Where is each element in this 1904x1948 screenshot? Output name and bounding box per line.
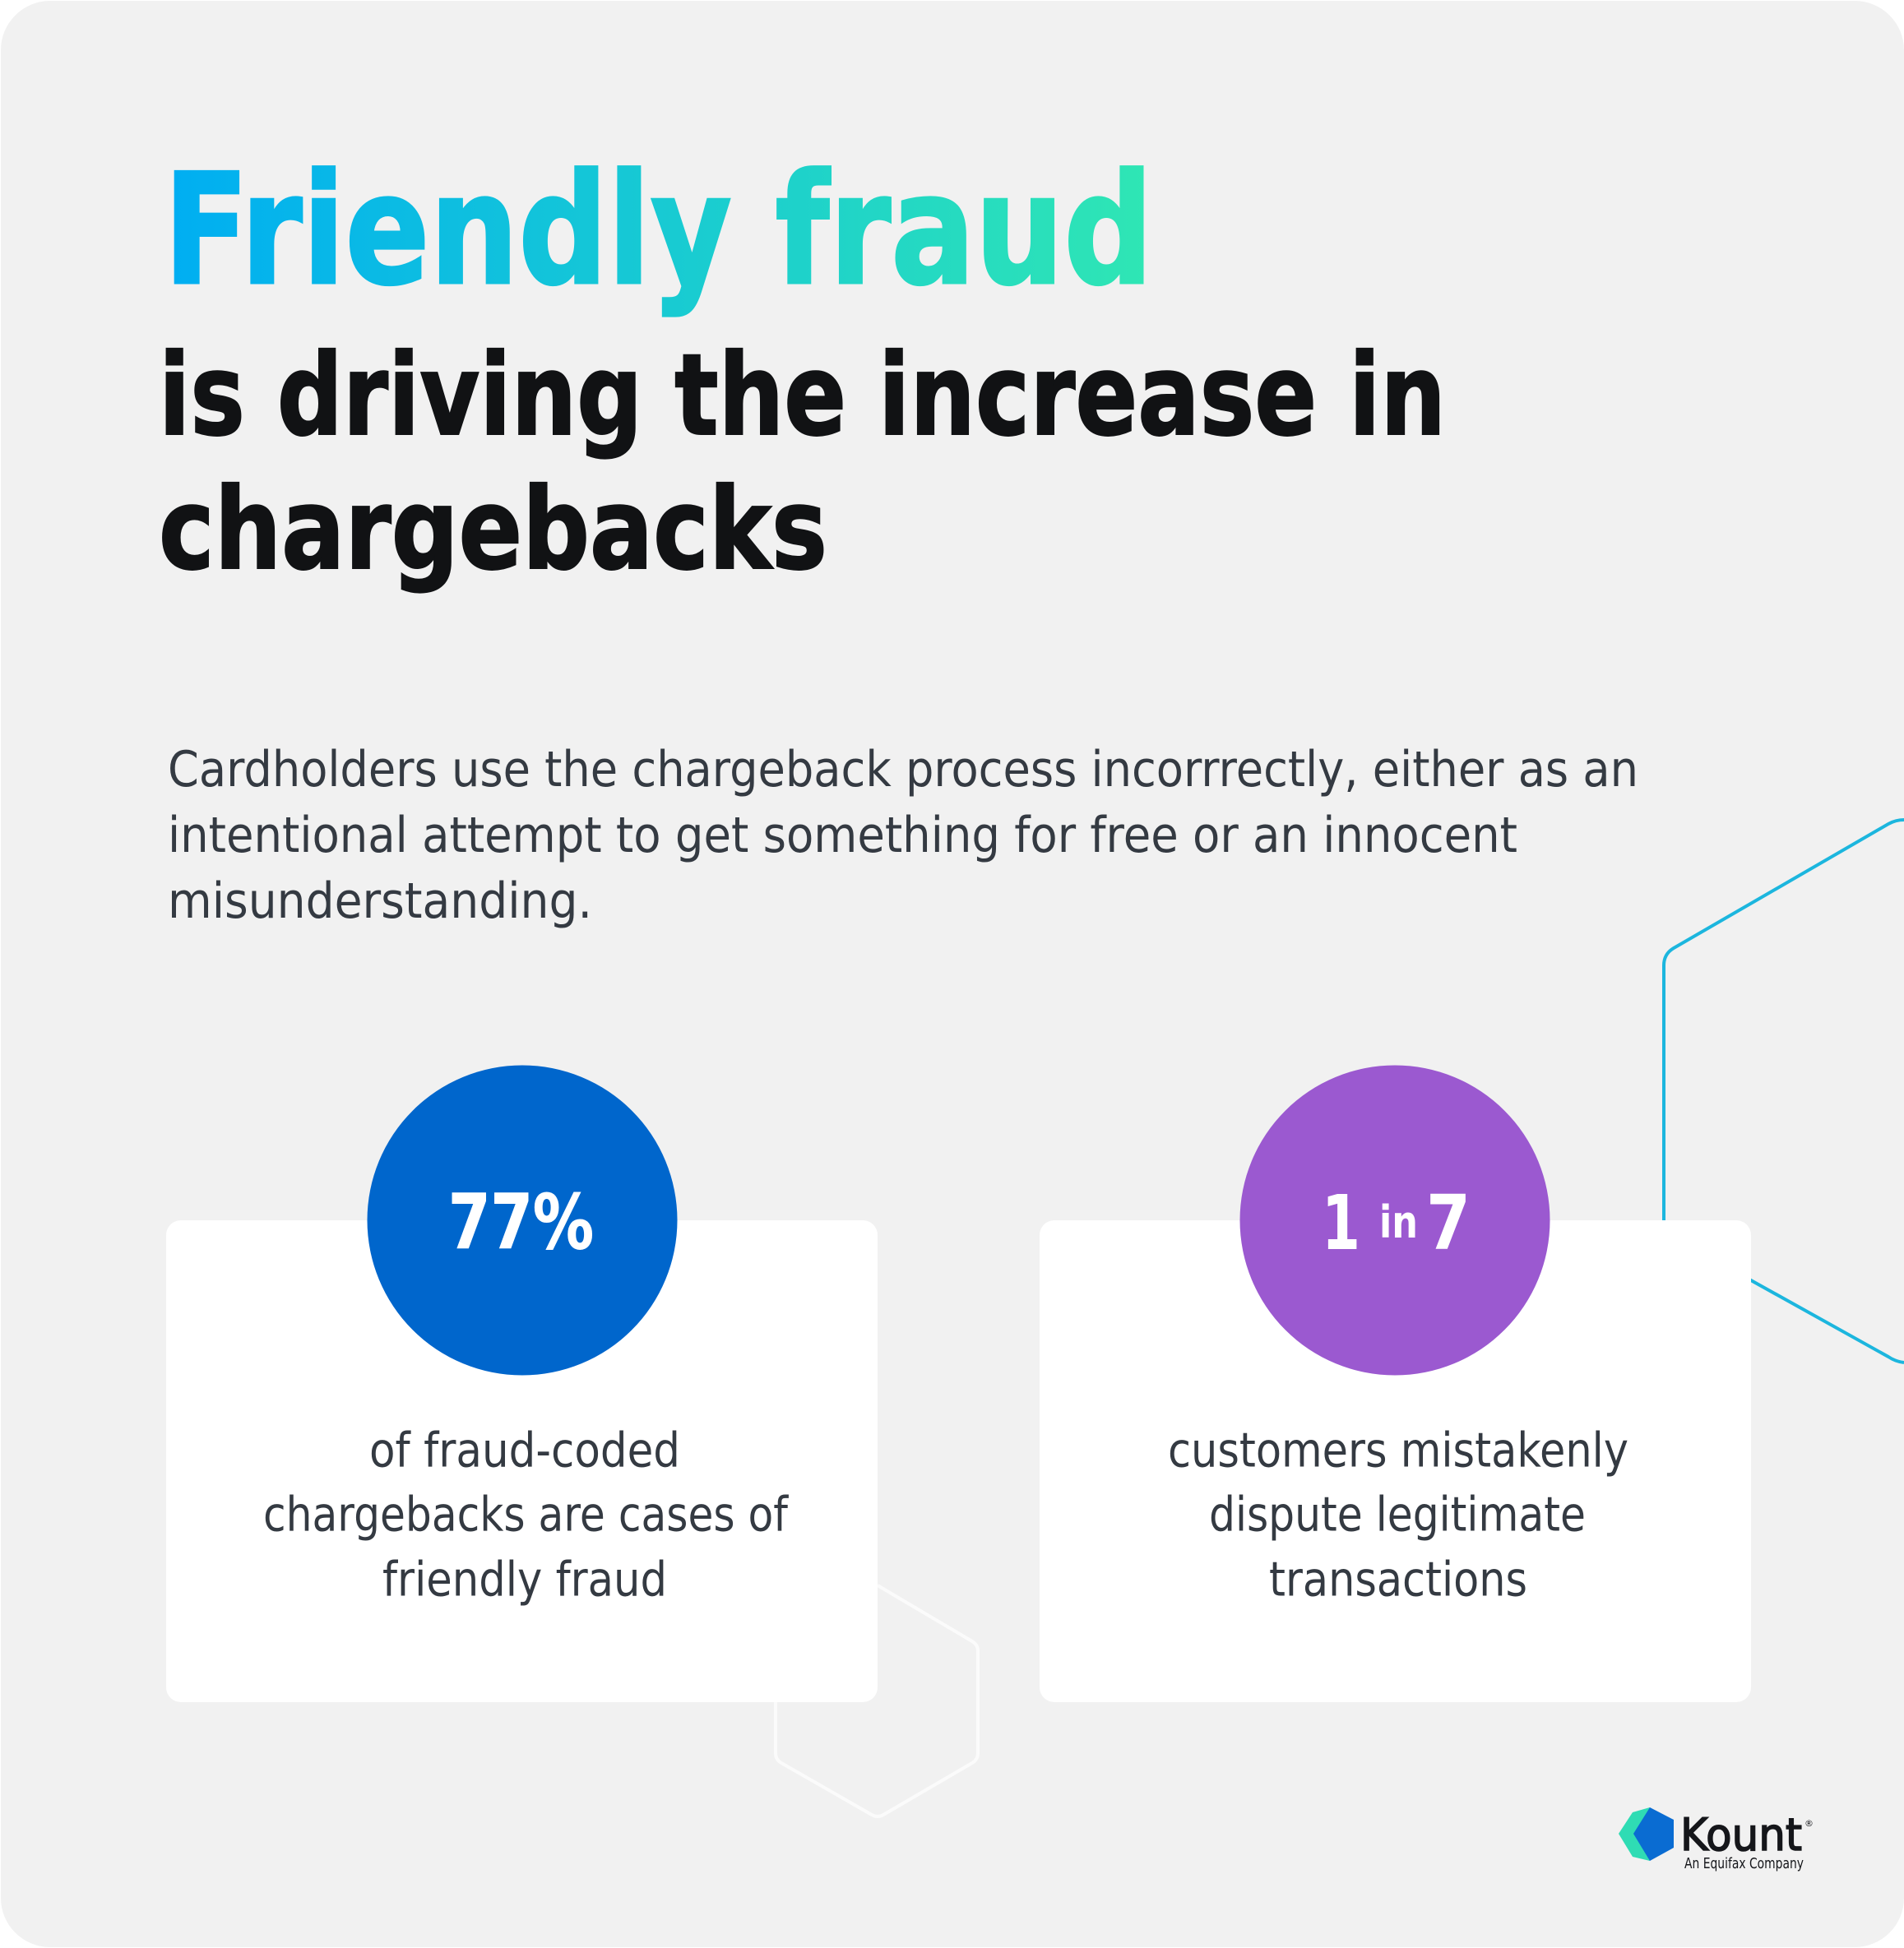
stat value: 77%: 77% — [448, 1178, 594, 1266]
tagline: An Equifax Company — [1684, 1855, 1804, 1872]
intro paragraph — [168, 741, 1638, 930]
intro paragraph: intentional attempt to get something for free or an innocent — [168, 807, 1517, 864]
stat description: friendly fraud — [382, 1551, 667, 1607]
logo: Kount — [1619, 1807, 1814, 1872]
stat circle: purple — [1240, 1066, 1550, 1375]
stat description — [263, 1423, 789, 1607]
title line 3: chargebacks — [159, 465, 827, 595]
decorative hexagon outline: cyan — [1664, 820, 1904, 1363]
panel: 1 in 7 stat card — [1040, 1066, 1751, 1702]
card background — [166, 1220, 878, 1702]
stat circle: blue — [367, 1066, 678, 1375]
wordmark: Kount — [1680, 1809, 1802, 1861]
title highlight: Friendly fraud: Friendly fraud — [164, 141, 1153, 319]
title line 2: is driving the increase in — [159, 331, 1446, 461]
icon: hexagon logo mark — [1619, 1807, 1674, 1861]
title — [159, 141, 1446, 595]
stat description — [1168, 1423, 1628, 1607]
stat value: 1 in 7 — [1322, 1179, 1471, 1267]
panel: 77% stat card — [166, 1066, 878, 1702]
intro paragraph: Cardholders use the chargeback process incorrrectly, either as an — [168, 741, 1638, 798]
stat description: customers mistakenly — [1168, 1423, 1628, 1478]
stat value: 1 in 7: in — [1379, 1196, 1418, 1248]
card background — [1040, 1220, 1751, 1702]
stat value: 1 in 7: 1 — [1322, 1179, 1360, 1267]
intro paragraph: misunderstanding. — [168, 872, 592, 930]
stat description: dispute legitimate — [1209, 1487, 1586, 1543]
stat value: 1 in 7: 7 — [1426, 1179, 1471, 1267]
stat description: transactions — [1269, 1551, 1527, 1607]
stat description: chargebacks are cases of — [263, 1487, 789, 1543]
registered mark: ® — [1804, 1818, 1814, 1829]
decorative hexagon outline: white — [776, 1585, 978, 1816]
stat description: of fraud-coded — [369, 1423, 680, 1478]
